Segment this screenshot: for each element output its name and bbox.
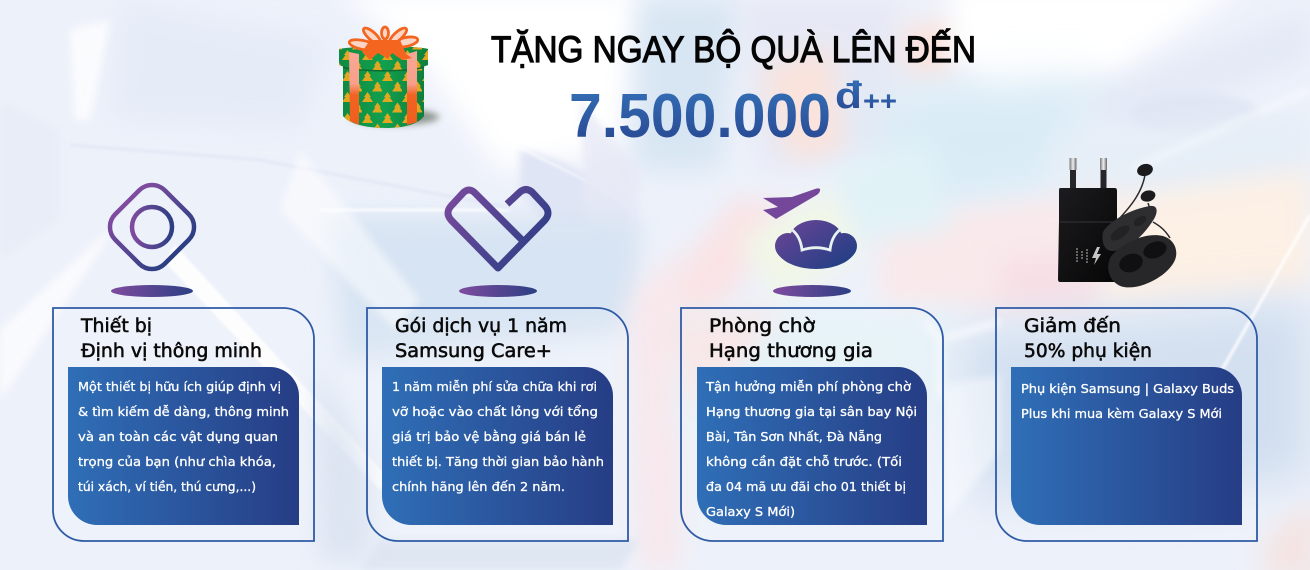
icon: Samsung Care+ heart — [448, 190, 548, 268]
title: TẶNG NGAY BỘ QUÀ LÊN ĐẾN — [491, 29, 976, 70]
heading: Samsung Care+ — [395, 316, 567, 362]
icon base: ellipse 1 — [111, 285, 193, 297]
description text: smart tag — [78, 379, 289, 494]
description box: business lounge — [697, 367, 927, 525]
prize amount: 7.500.000 — [569, 82, 831, 151]
panel: accessories discount — [996, 308, 1257, 541]
panel: business lounge — [681, 308, 943, 541]
prize amount: ++ — [863, 86, 897, 116]
description text: Samsung Care+: vỡ hoặc vào chất lỏng với tổng — [392, 404, 598, 419]
heading: accessories discount — [1024, 316, 1152, 362]
description text: business lounge: Tận hưởng miễn phí phòng chờ — [705, 379, 911, 394]
description text: business lounge — [705, 379, 917, 519]
description text: business lounge: đa 04 mã ưu đãi cho 01 thiết bị — [706, 479, 906, 494]
heading: smart tag: Thiết bị — [80, 316, 152, 337]
heading: accessories discount: Giảm đến — [1024, 316, 1121, 337]
description box: smart tag — [68, 367, 299, 525]
icon: gift box — [339, 26, 439, 128]
description text: accessories discount: Plus khi mua kèm Galaxy S Mới — [1021, 406, 1222, 421]
icon: plane and lounge sofa — [763, 188, 857, 269]
description text: Samsung Care+ — [392, 379, 604, 494]
description text: accessories discount: Phụ kiện Samsung | Galaxy Buds — [1021, 381, 1234, 396]
description text: business lounge: Bài, Tân Sơn Nhất, Đà Nẵng — [706, 429, 882, 444]
heading: Samsung Care+: Gói dịch vụ 1 năm — [395, 316, 567, 337]
description text: smart tag: Một thiết bị hữu ích giúp định vị — [78, 379, 281, 394]
description text: Samsung Care+: thiết bị. Tăng thời gian bảo hành — [392, 454, 604, 469]
description text: business lounge: Galaxy S Mới) — [706, 504, 795, 519]
description text: Samsung Care+: giá trị bảo vệ bằng giá bán lẻ — [392, 429, 586, 444]
icon: charger, earphones and Galaxy Buds — [1058, 158, 1176, 287]
icon base: ellipse 3 — [773, 285, 851, 297]
description text: business lounge: Hạng thương gia tại sân bay Nội — [706, 404, 917, 419]
heading: smart tag — [80, 316, 262, 362]
description box: Samsung Care+ — [382, 367, 613, 525]
heading: smart tag: Định vị thông minh — [81, 341, 262, 362]
heading: business lounge: Phòng chờ — [709, 316, 816, 337]
description text: smart tag: túi xách, ví tiền, thú cưng,...) — [78, 479, 256, 494]
description text: Samsung Care+: chính hãng lên đến 2 năm. — [392, 479, 565, 494]
description box: accessories discount — [1011, 367, 1242, 525]
description text: business lounge: không cần đặt chỗ trước. (Tối — [706, 454, 902, 469]
icon: smart tag locator — [103, 178, 201, 276]
heading: business lounge — [709, 316, 873, 362]
description text: smart tag: trọng của bạn (như chìa khóa, — [78, 454, 276, 469]
heading: Samsung Care+: Samsung Care+ — [395, 341, 552, 362]
heading: accessories discount: 50% phụ kiện — [1024, 341, 1152, 362]
heading: business lounge: Hạng thương gia — [709, 341, 873, 362]
icon base: ellipse 2 — [459, 285, 537, 297]
description text: smart tag: và an toàn các vật dụng quan — [78, 429, 278, 444]
panel: smart tag — [53, 308, 314, 541]
description text: smart tag: & tìm kiếm dễ dàng, thông minh — [78, 404, 289, 419]
description text: Samsung Care+: 1 năm miễn phí sửa chữa khi rơi — [392, 379, 597, 394]
prize amount: đ — [835, 75, 863, 117]
description text: accessories discount — [1021, 381, 1234, 421]
panel: Samsung Care+ — [367, 308, 628, 541]
